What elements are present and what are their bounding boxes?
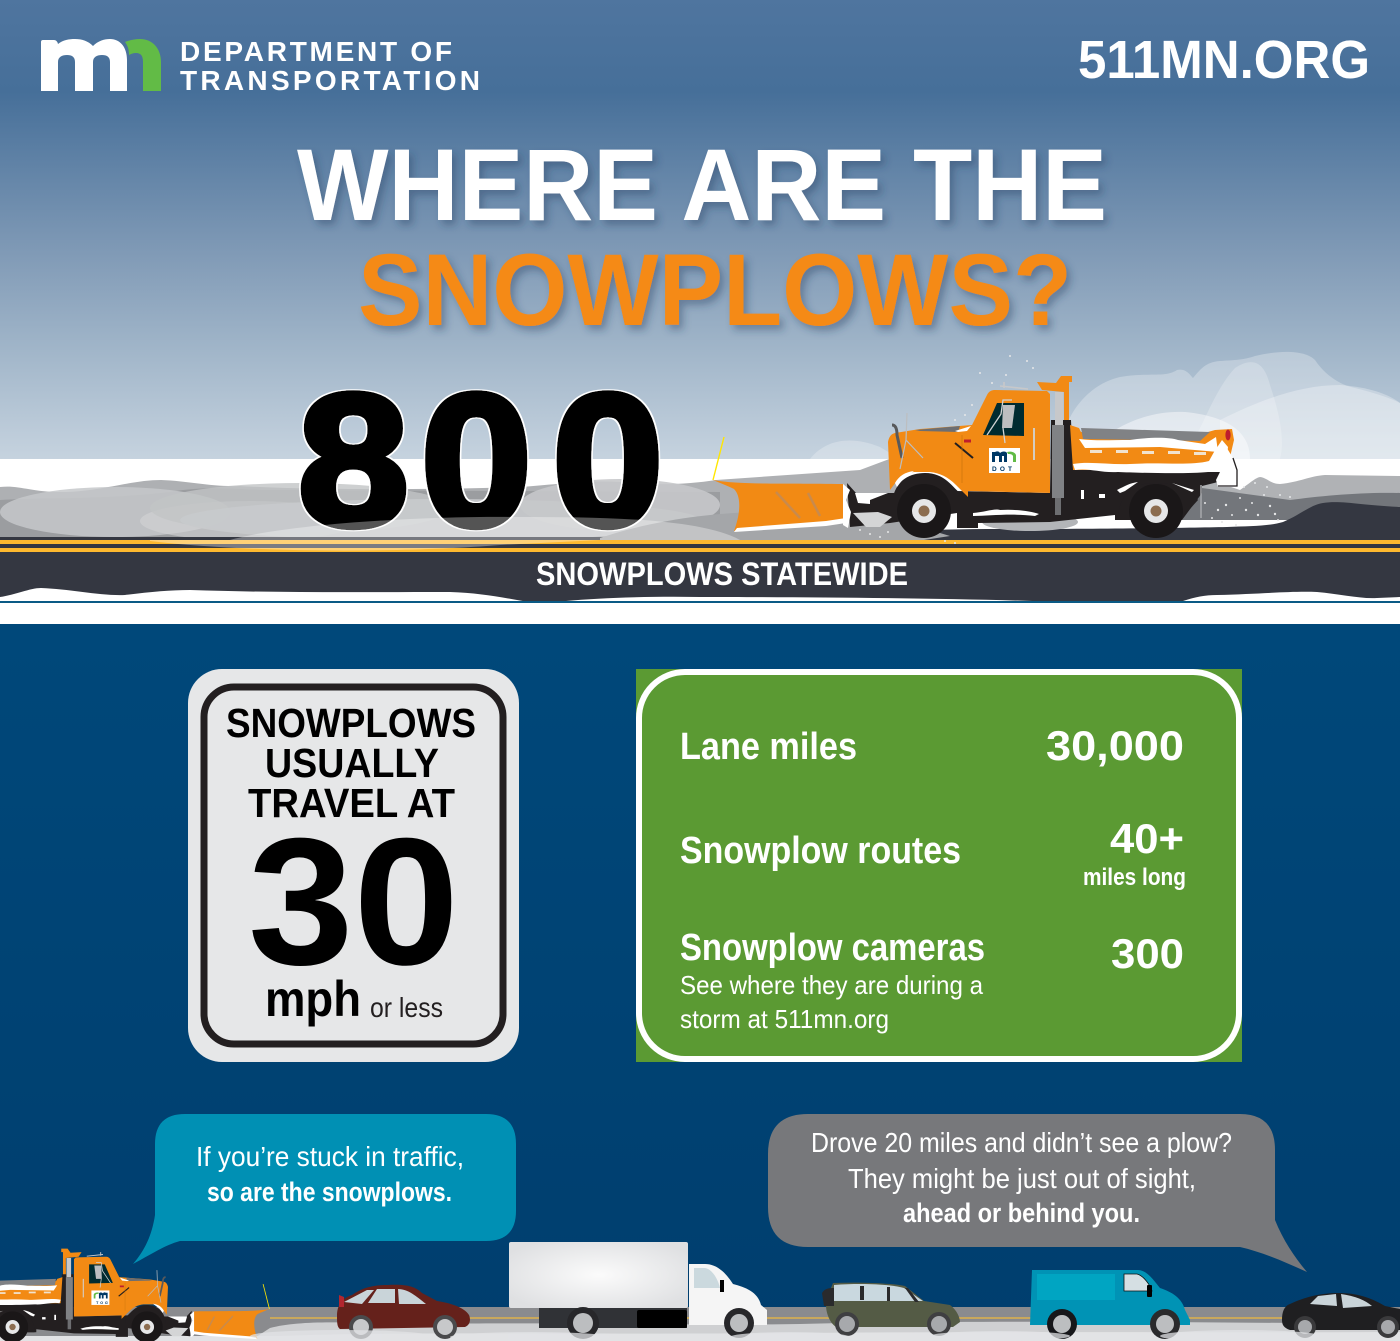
white snow edge of road: [0, 588, 1400, 602]
vehicle: green SUV: [822, 1283, 960, 1336]
door logo: DOT: [992, 466, 1012, 473]
hero bottom rule: [0, 601, 1400, 603]
wheel arches: [893, 473, 1198, 520]
logo wordmark: [180, 36, 480, 96]
title: [297, 128, 1107, 347]
number 800: 800: [298, 356, 663, 566]
windshield and door window: [983, 400, 1024, 443]
callout: out of sight: Drove 20 miles and didn’t see a plow?: [811, 1127, 1232, 1158]
stat: snowplow routes: [680, 815, 1186, 891]
door logo: [989, 448, 1020, 473]
sign heading: [226, 700, 476, 826]
navy lower panel: [0, 624, 1400, 1341]
stat: snowplow cameras: See where they are during a: [680, 970, 983, 1000]
vehicle: red car: [337, 1285, 470, 1339]
sign heading: SNOWPLOWS: [226, 700, 476, 746]
callout: stuck in traffic: [133, 1114, 516, 1264]
speed qualifier: or less: [370, 992, 443, 1023]
logo wordmark: DEPARTMENT OF: [180, 36, 452, 67]
vehicle: white box truck: [509, 1242, 767, 1339]
stat: snowplow routes: miles long: [1083, 864, 1186, 891]
tail light: [1225, 430, 1231, 440]
chassis: [847, 420, 1220, 528]
speed unit: mph: [265, 971, 361, 1027]
exhaust stack and visor: [1037, 376, 1072, 515]
foreground road snow: [250, 1330, 1320, 1341]
lower road: [0, 1307, 1400, 1341]
yellow centre lines: [0, 540, 1400, 552]
stat: lane miles: Lane miles: [680, 726, 857, 768]
panel: speed sign: [188, 669, 519, 1062]
vehicle: black car: [1282, 1293, 1400, 1338]
website url: 511MN.ORG: [1078, 30, 1370, 90]
vehicle: teal van: [1030, 1270, 1190, 1339]
stat: snowplow cameras: 300: [1111, 930, 1184, 977]
sign heading: TRAVEL AT: [248, 780, 455, 826]
hood shadow: [915, 426, 960, 432]
stat: snowplow cameras: storm at 511mn.org: [680, 1004, 889, 1034]
snowy horizon band: [0, 459, 1400, 519]
stat: snowplow routes: Snowplow routes: [680, 830, 961, 872]
snowplow truck: [713, 376, 1237, 538]
snow accents: [855, 426, 1194, 516]
sky background: [0, 0, 1400, 460]
callout: stuck in traffic: If you’re stuck in traffic,: [196, 1141, 464, 1172]
road: [0, 502, 1400, 601]
road label: SNOWPLOWS STATEWIDE: [536, 556, 908, 592]
title: SNOWPLOWS?: [358, 233, 1072, 347]
panel: statistics: [636, 669, 1242, 1062]
rear wheel: [1129, 484, 1183, 538]
stat: lane miles: [680, 722, 1184, 769]
logo mark: [41, 39, 161, 91]
dump bed: [1070, 425, 1237, 518]
sign heading: USUALLY: [265, 740, 439, 786]
callout: out of sight: They might be just out of sight,: [848, 1163, 1196, 1194]
snow fog over number: [150, 517, 740, 551]
mirrors and cab details: [892, 382, 1034, 483]
stat: lane miles: 30,000: [1046, 722, 1184, 769]
snow clouds behind truck: [810, 352, 1400, 459]
plow marker pole: [713, 437, 724, 480]
front wheel: [897, 484, 951, 538]
white divider: [0, 603, 1400, 624]
callout: stuck in traffic: so are the snowplows.: [207, 1177, 452, 1207]
plow truck on lower road: [0, 1249, 269, 1341]
title: WHERE ARE THE: [297, 128, 1107, 242]
snow spray: [859, 355, 1291, 544]
cab: [888, 390, 1050, 497]
stat: snowplow routes: 40+: [1110, 815, 1184, 862]
logo wordmark: TRANSPORTATION: [180, 65, 480, 96]
plow blade: [713, 480, 892, 532]
callout: out of sight: ahead or behind you.: [903, 1198, 1140, 1228]
speed value: 30: [248, 801, 459, 1003]
grey snow banks: [0, 455, 1400, 541]
department logo: [41, 36, 480, 96]
callout: out of sight: [768, 1114, 1307, 1272]
stat: snowplow cameras: [680, 927, 1184, 1034]
stat: snowplow cameras: Snowplow cameras: [680, 927, 985, 969]
